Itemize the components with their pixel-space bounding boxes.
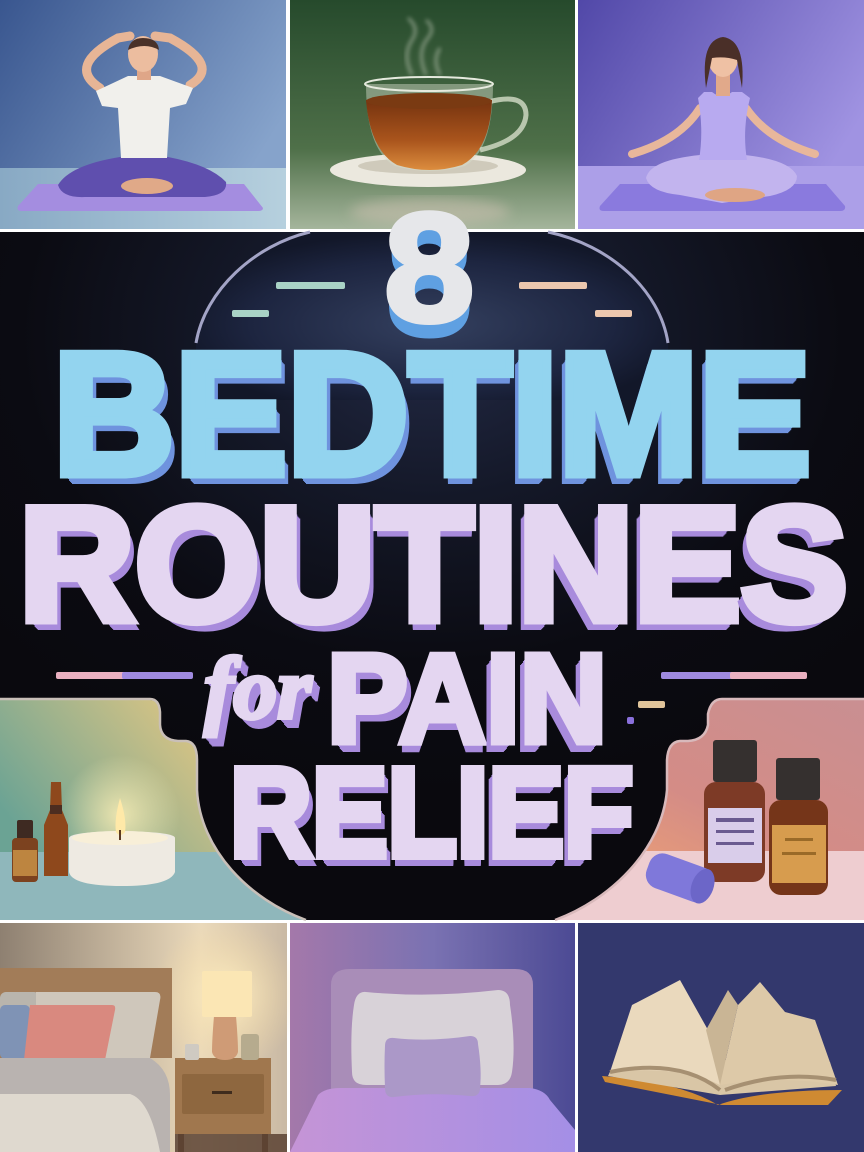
panel: essential oils and roller (550, 698, 864, 923)
panel: dark central background (0, 232, 864, 920)
panel: stretching yoga pose (0, 0, 286, 229)
dome behind the number (196, 232, 668, 400)
icon: purple roller (646, 853, 715, 904)
icon: steam (407, 18, 440, 75)
decorative arc (196, 232, 668, 343)
icon: candle (69, 798, 175, 886)
icon: bedside table (175, 1058, 271, 1152)
icon: tall bottle (44, 782, 68, 876)
panel: candle and oils (0, 698, 310, 922)
panel: open book (578, 923, 864, 1152)
title: PAIN: PAIN (327, 628, 607, 769)
title: BEDTIME: BEDTIME (53, 316, 811, 511)
icon: small bottle (12, 820, 38, 882)
title: number 8: 8 (384, 181, 475, 354)
title: RELIEF: RELIEF (230, 742, 633, 883)
accent dashes (56, 282, 807, 724)
panel: cup of tea (290, 0, 575, 229)
title: ROUTINES: ROUTINES (19, 474, 848, 655)
icon: second bottle (769, 758, 828, 895)
panel: cozy bedroom (0, 920, 301, 1152)
title: for: for (204, 641, 312, 738)
icon: lamp (202, 971, 252, 1060)
icon: large bottle (704, 740, 765, 882)
panel: meditation pose (578, 0, 864, 229)
panel: pillows on bed (290, 923, 575, 1152)
